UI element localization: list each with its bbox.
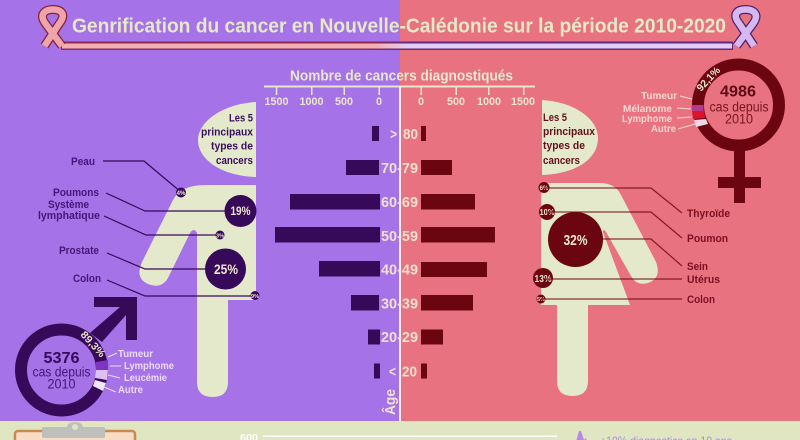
male labels: Système xyxy=(48,199,89,211)
icon: clipboard xyxy=(15,422,135,440)
chart title: Nombre de cancers diagnostiqués xyxy=(290,68,513,84)
axis: female: 500 xyxy=(447,96,465,108)
axis: male: 500 xyxy=(335,96,353,108)
title banner band xyxy=(61,42,733,50)
female leader lines xyxy=(541,188,682,299)
panel: male background xyxy=(0,0,400,421)
axis: male: 0 xyxy=(376,96,382,108)
female donut labels: Autre xyxy=(651,124,676,135)
donut segment: lymphome xyxy=(692,111,705,119)
age labels xyxy=(381,127,418,380)
male head callout xyxy=(198,102,256,177)
female donut labels xyxy=(622,91,695,135)
female bubble: Colon xyxy=(536,294,546,304)
male bubble: Prostate xyxy=(205,248,246,290)
age labels: 60-69 xyxy=(381,195,418,211)
female bubble: Poumon: 10% xyxy=(540,208,554,217)
axis: male: 1500 xyxy=(264,96,288,108)
title: Genrification du cancer en Nouvelle-Calédonie sur la période 2010-2020 xyxy=(72,15,726,37)
male head callout: cancers xyxy=(216,155,253,167)
figure: male silhouette xyxy=(139,185,256,397)
age labels: > xyxy=(390,127,397,143)
age labels: 30-39 xyxy=(381,296,418,312)
male donut labels: Autre xyxy=(118,385,143,396)
female head callout: types de xyxy=(543,140,585,152)
donut segment: melanome xyxy=(692,105,704,111)
female bubble: Poumon xyxy=(539,204,555,220)
donut total: 5376 xyxy=(44,350,80,367)
axis: male: 1000 xyxy=(300,96,324,108)
icon: pink ribbon xyxy=(43,10,63,46)
donut segment: autre xyxy=(694,119,708,127)
female head callout: cancers xyxy=(543,155,580,167)
female bubble: Sein xyxy=(548,212,603,267)
panel: female background xyxy=(400,0,800,421)
female bubble: Uterus: 13% xyxy=(534,274,552,285)
male labels: Prostate xyxy=(59,245,99,257)
male donut labels: Tumeur xyxy=(118,349,153,360)
icon: rising trend xyxy=(575,431,588,440)
male bubble: Colon: 9% xyxy=(251,294,259,300)
male donut labels: Leucémie xyxy=(124,373,167,384)
male donut labels xyxy=(104,349,174,396)
male bubble: Systeme lymphatique xyxy=(216,230,224,240)
female labels: Sein xyxy=(687,261,708,273)
female labels: Thyroïde xyxy=(687,208,730,220)
female labels xyxy=(687,208,730,306)
age labels: 80 xyxy=(403,127,418,143)
male bubble: Peau: 4% xyxy=(177,191,186,197)
male labels: Poumons xyxy=(53,187,99,199)
axis: female: 1000 xyxy=(477,96,501,108)
male leader lines xyxy=(103,161,255,296)
donut caption: cas depuis xyxy=(32,364,91,380)
male labels xyxy=(38,156,101,285)
female head callout: Les 5 xyxy=(543,112,567,124)
female bubble: Thyroide: 6% xyxy=(540,186,549,192)
axis: female: 0 xyxy=(418,96,424,108)
female bubble: Colon: 5% xyxy=(537,297,545,303)
male bubble: Systeme lymphatique: 3% xyxy=(216,234,224,240)
female bubble: Thyroide xyxy=(538,182,550,193)
axis: male xyxy=(264,86,400,108)
male bubble: Prostate: 25% xyxy=(214,262,238,277)
panel: bottom strip xyxy=(0,421,800,440)
female bubble: Uterus xyxy=(533,268,553,288)
female labels: Utérus xyxy=(687,274,720,286)
male labels: Colon xyxy=(73,273,101,285)
figure: female silhouette xyxy=(541,183,658,396)
female labels: Poumon xyxy=(687,233,728,245)
female donut labels: Mélanome xyxy=(623,104,672,115)
donut percent: 92,1% xyxy=(694,64,723,94)
bar chart: male by age xyxy=(275,126,380,378)
male head callout: Les 5 xyxy=(229,112,253,124)
age labels: 70-79 xyxy=(381,161,418,177)
donut total: 4986 xyxy=(720,84,756,101)
donut year: 2010 xyxy=(725,111,753,126)
axis: female xyxy=(400,86,535,108)
male head callout: principaux xyxy=(201,126,254,138)
axis label: age: Âge xyxy=(381,389,399,415)
male donut labels: Lymphome xyxy=(124,361,174,372)
age labels: 40-49 xyxy=(381,262,418,278)
donut caption: cas depuis xyxy=(710,100,769,115)
female labels: Colon xyxy=(687,294,715,306)
male bubble: Poumons: 19% xyxy=(230,206,250,218)
age labels: < xyxy=(389,364,396,380)
icon: female symbol with donut xyxy=(692,64,779,203)
center axis line xyxy=(399,86,401,421)
age labels: 20 xyxy=(402,364,417,380)
female donut labels: Tumeur xyxy=(641,91,677,102)
female head callout: principaux xyxy=(543,126,596,138)
male bubble: Colon xyxy=(250,291,260,300)
icon: lavender ribbon xyxy=(736,10,756,46)
male bubble: Peau xyxy=(176,188,186,198)
female donut labels: Lymphome xyxy=(622,114,672,125)
donut percent: 89,3% xyxy=(78,329,108,361)
male labels: lymphatique xyxy=(38,210,100,222)
female head callout xyxy=(542,100,598,175)
male labels: Peau xyxy=(71,156,95,168)
female bubble: Sein: 32% xyxy=(564,233,588,249)
male head callout: types de xyxy=(211,140,253,152)
age labels: 50-59 xyxy=(381,229,418,245)
donut segment: leucemie xyxy=(95,370,108,380)
bar chart: female by age xyxy=(421,126,495,378)
donut segment: autre xyxy=(93,380,106,391)
male bubble: Poumons xyxy=(224,195,256,227)
age labels: 20-29 xyxy=(381,330,418,346)
axis: female: 1500 xyxy=(511,96,535,108)
donut segment: lymphome xyxy=(96,360,108,370)
donut year: 2010 xyxy=(48,376,76,392)
icon: male symbol with donut xyxy=(21,297,137,410)
